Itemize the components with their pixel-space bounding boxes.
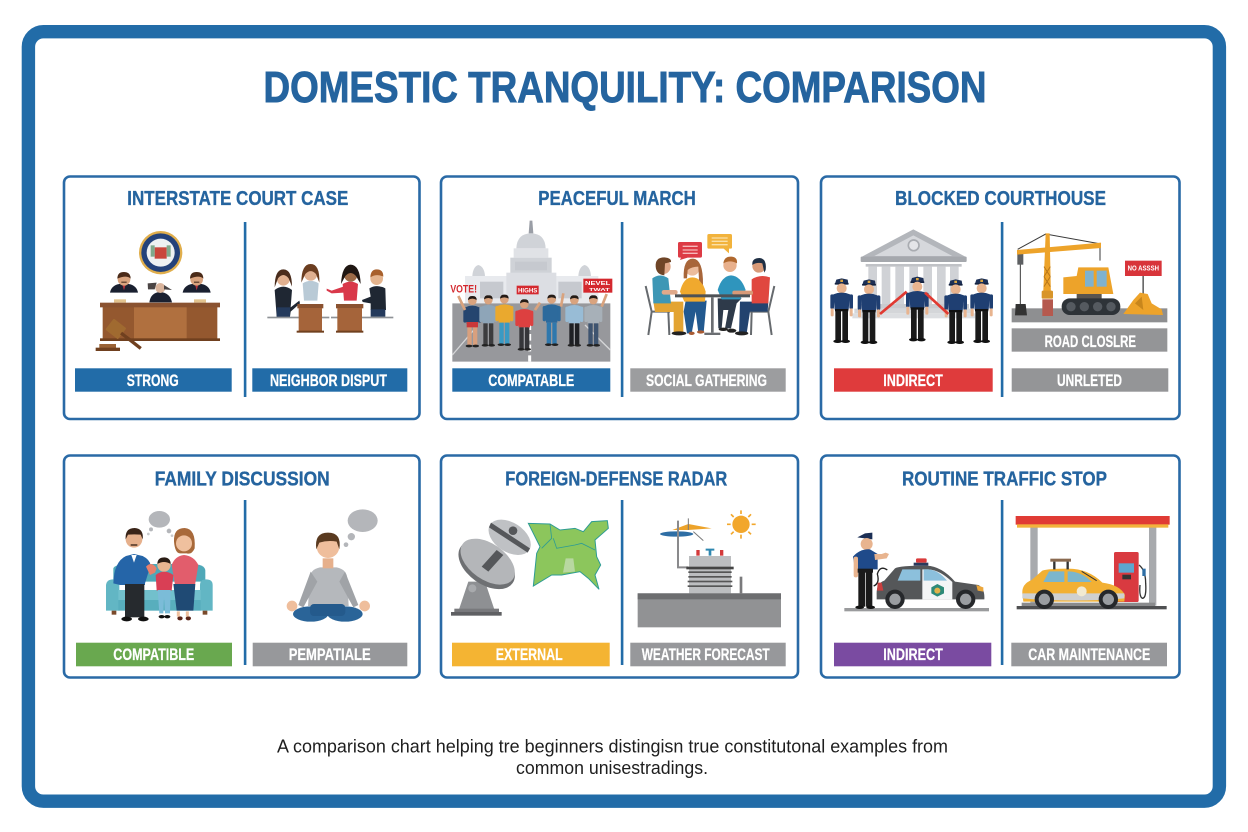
label: neighbor dispute: NEIGHBOR DISPUT bbox=[270, 371, 387, 390]
illustration: construction site: NO ASSSH bbox=[1128, 264, 1159, 273]
illustration: car at gas station bbox=[1016, 516, 1170, 609]
illustration: construction site bbox=[1012, 233, 1167, 352]
label: unrelated bbox=[1012, 368, 1168, 392]
illustration: marchers before capitol: TWAT bbox=[589, 287, 610, 293]
label: car maintenance bbox=[1011, 643, 1167, 666]
label: weather forecast bbox=[630, 643, 786, 666]
label: strong bbox=[75, 368, 232, 392]
illustration: social gathering at table bbox=[646, 234, 774, 335]
label: indirect bbox=[834, 643, 991, 666]
label: unrelated: UNRLETED bbox=[1057, 371, 1122, 390]
illustration: judges at bench with seal and gavel bbox=[96, 231, 220, 354]
panel: interstate court case bbox=[64, 176, 420, 419]
label: social gathering: SOCIAL GATHERING bbox=[646, 371, 767, 390]
illustration: marchers before capitol bbox=[450, 221, 612, 362]
panel: blocked courthouse bbox=[821, 176, 1180, 419]
illustration: marchers before capitol: NEVEL bbox=[585, 281, 611, 287]
label: compatible: COMPATIBLE bbox=[113, 645, 194, 664]
speech bubbles bbox=[678, 234, 732, 260]
title: DOMESTIC TRANQUILITY: COMPARISON bbox=[264, 63, 986, 112]
illustration: neighbors at podiums bbox=[267, 264, 393, 333]
label: external: EXTERNAL bbox=[496, 645, 563, 664]
label: pempatiale: PEMPATIALE bbox=[289, 645, 371, 664]
label: neighbor dispute bbox=[252, 368, 407, 392]
label: pempatiale bbox=[253, 643, 407, 666]
heading: peaceful march: PEACEFUL MARCH bbox=[538, 187, 696, 210]
heading: blocked courthouse: BLOCKED COURTHOUSE bbox=[895, 187, 1106, 210]
illustration: marchers before capitol: HIGHS bbox=[518, 287, 538, 294]
label: car maintenance: CAR MAINTENANCE bbox=[1028, 645, 1150, 664]
label: compatible bbox=[76, 643, 232, 666]
label: indirect: INDIRECT bbox=[883, 371, 943, 390]
label: weather forecast: WEATHER FORECAST bbox=[642, 645, 770, 664]
heading: interstate court case: INTERSTATE COURT CASE bbox=[127, 187, 348, 210]
label: indirect: INDIRECT bbox=[883, 645, 943, 664]
panel: family discussion bbox=[64, 456, 420, 678]
heading: foreign-defense radar: FOREIGN-DEFENSE RADAR bbox=[505, 468, 727, 491]
illustration: radar dish and map bbox=[450, 512, 608, 616]
label: external bbox=[452, 643, 610, 666]
label: social gathering bbox=[630, 368, 786, 392]
illustration: family on sofa bbox=[106, 511, 213, 621]
illustration: person meditating bbox=[287, 509, 378, 622]
panel: foreign-defense radar bbox=[441, 456, 798, 678]
label: compatable bbox=[452, 368, 610, 392]
panel: peaceful march bbox=[441, 176, 798, 419]
label: road closure bbox=[1012, 328, 1167, 352]
heading: routine traffic stop: ROUTINE TRAFFIC STOP bbox=[902, 468, 1107, 491]
label: compatable: COMPATABLE bbox=[488, 371, 574, 390]
label: indirect bbox=[834, 368, 993, 392]
illustration: police officer and patrol car bbox=[844, 533, 989, 611]
illustration: police line at courthouse bbox=[830, 229, 993, 344]
footer caption: A comparison chart helping tre beginners distingisn true constitutonal examples from bbox=[277, 737, 948, 757]
footer caption bbox=[277, 737, 948, 778]
panel: routine traffic stop bbox=[821, 456, 1180, 678]
footer caption: common unisestradings. bbox=[516, 758, 708, 778]
label: strong: STRONG bbox=[127, 371, 179, 390]
illustration: marchers before capitol: VOTE! bbox=[450, 283, 477, 295]
illustration: weather station bbox=[638, 510, 781, 627]
label: road closure: ROAD CLOSLRE bbox=[1045, 332, 1136, 351]
heading: family discussion: FAMILY DISCUSSION bbox=[155, 468, 330, 491]
